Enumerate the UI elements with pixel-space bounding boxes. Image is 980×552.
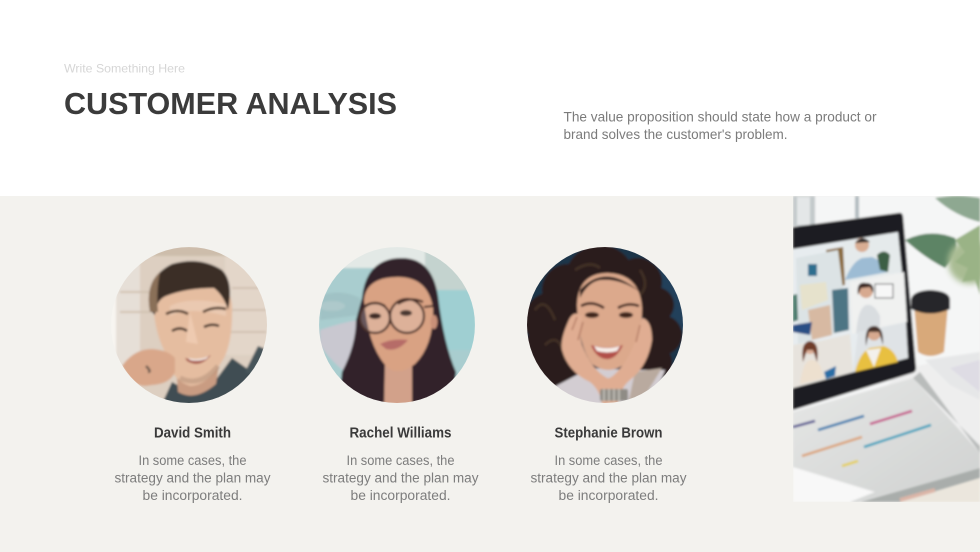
title: CUSTOMER ANALYSIS [64,86,397,121]
hand [122,349,175,386]
face [364,277,433,371]
face [154,286,233,386]
description: Rachel Williams [322,453,479,503]
name: Stephanie Brown: Stephanie Brown [554,426,662,442]
desk [793,352,980,502]
shirt [554,366,667,403]
description: Rachel Williams: be incorporated. [350,488,450,503]
description: Stephanie Brown: be incorporated. [558,488,658,503]
hair [149,261,230,315]
curly hair [524,245,682,396]
lips [380,340,408,350]
name: Rachel Williams: Rachel Williams [350,426,452,442]
shirt [163,357,251,403]
eyes and brows [166,311,188,314]
video tile: woman in white [850,272,907,334]
intro text: The value proposition should state how a product or [564,108,877,124]
photo: laptop on a desk [793,196,980,502]
description: David Smith [114,453,271,503]
smile [591,345,623,359]
coloured gantt bars [793,421,815,427]
photo: portrait of Stephanie Brown [524,245,685,410]
neck and chest [384,362,412,410]
brows and eyes [581,303,639,308]
description: Stephanie Brown [530,453,687,503]
face [577,273,642,370]
description: Stephanie Brown: strategy and the plan may [530,470,687,486]
eyes [369,313,381,319]
hands [562,314,652,404]
mouth [185,355,211,364]
foliage [905,233,956,268]
intro text [564,108,877,142]
video tile: woman in cream [793,334,853,388]
screen [793,232,908,388]
screen bezel [793,213,916,410]
video tile: man in blue shirt [898,240,904,272]
name: David Smith: David Smith [154,426,231,442]
description: David Smith: In some cases, the [138,453,246,468]
background band [0,196,980,552]
watch [600,389,628,401]
photo: portrait of David Smith [116,247,267,403]
photo: portrait of Rachel Williams [318,246,476,410]
intro text: brand solves the customer's problem. [564,126,788,142]
description: David Smith: be incorporated. [142,488,242,503]
glasses [360,299,424,333]
paper corner [793,467,875,502]
keyboard deck [793,378,980,502]
coffee cup [914,305,948,356]
neck [176,368,219,398]
video tile: shelf room [796,250,848,344]
video tile: woman in yellow [856,322,910,364]
description: Stephanie Brown: In some cases, the [554,453,662,468]
description: Rachel Williams: strategy and the plan may [322,470,479,486]
description: David Smith: strategy and the plan may [114,470,271,486]
eyebrow text: Write Something Here [64,62,185,76]
hair [338,258,456,410]
description: Rachel Williams: In some cases, the [346,453,454,468]
